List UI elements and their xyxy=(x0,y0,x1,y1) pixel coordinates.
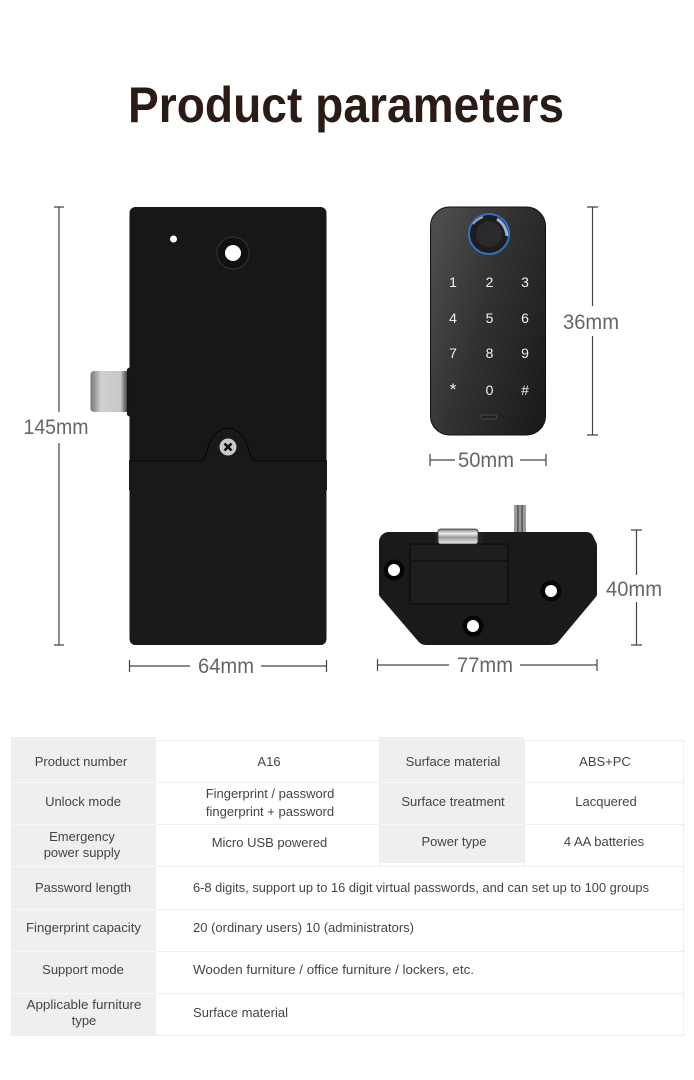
keypad digits: 5 xyxy=(486,310,494,326)
keypad digits: 9 xyxy=(521,345,529,361)
dimension: 145mm height xyxy=(24,207,88,645)
dimension: 40mm height: 40mm xyxy=(606,578,662,601)
row: emergency power: Power type xyxy=(421,834,487,849)
row: unlock mode: Unlock mode xyxy=(45,794,121,809)
dimension: 50mm width xyxy=(430,449,546,472)
dimension: 36mm height: 36mm xyxy=(563,311,619,334)
dimension: 77mm width: 77mm xyxy=(457,654,513,677)
row: product number: ABS+PC xyxy=(579,754,631,769)
dimension: 64mm width xyxy=(130,655,326,678)
row: emergency power: Emergency xyxy=(49,829,115,844)
lock body front view xyxy=(90,207,327,645)
row: applicable furniture: Applicable furniture xyxy=(26,997,142,1012)
icon: fingerprint sensor xyxy=(469,214,509,254)
parameter table xyxy=(11,737,684,1036)
row: emergency power: Micro USB powered xyxy=(212,835,327,850)
keypad digits: 6 xyxy=(521,310,529,326)
row: password length: Password length xyxy=(35,880,131,895)
row: applicable furniture: type xyxy=(72,1013,96,1028)
icon: screw holes xyxy=(384,560,562,636)
keypad digits: 3 xyxy=(521,274,529,290)
row: unlock mode: fingerprint + password xyxy=(206,804,334,819)
dimension: 77mm width xyxy=(378,654,597,677)
row: product number: A16 xyxy=(257,754,281,769)
dimension: 145mm height: 145mm xyxy=(24,416,88,439)
row: fingerprint capacity xyxy=(26,920,414,935)
icon: led dot xyxy=(170,236,177,242)
row: fingerprint capacity: 20 (ordinary users) 10 (administrators) xyxy=(193,920,414,935)
row: product number: Surface material xyxy=(406,754,500,769)
keypad digits: 8 xyxy=(486,345,494,361)
row: emergency power: power supply xyxy=(44,845,121,860)
dimension: 64mm width: 64mm xyxy=(198,655,254,678)
row: password length: 6-8 digits, support up to 16 digit virtual passwords, and can set up to 100 groups xyxy=(193,880,649,895)
dimension: 40mm height xyxy=(606,530,662,645)
keypad digits xyxy=(449,274,529,399)
row: unlock mode: Fingerprint / password xyxy=(206,786,334,801)
row: unlock mode: Lacquered xyxy=(575,794,637,809)
keypad panel xyxy=(430,207,546,435)
keypad digits: 7 xyxy=(449,345,457,361)
icon: latch pin xyxy=(514,505,526,533)
icon: hinge xyxy=(434,529,484,544)
dimension: 50mm width: 50mm xyxy=(458,449,514,472)
lower cover xyxy=(129,428,327,645)
icon: silver bolt xyxy=(90,371,128,412)
icon: screw hole xyxy=(217,237,249,269)
row: support mode: Support mode xyxy=(42,962,124,977)
icon: usb port xyxy=(481,415,497,419)
row: emergency power: 4 AA batteries xyxy=(564,834,645,849)
row: product number xyxy=(35,754,631,769)
row: emergency power xyxy=(44,829,645,860)
dimension: 36mm height xyxy=(563,207,619,435)
keypad digits: * xyxy=(450,380,457,399)
row: fingerprint capacity: Fingerprint capacity xyxy=(26,920,141,935)
row: unlock mode xyxy=(45,786,637,819)
body panel xyxy=(130,207,326,645)
row: unlock mode: Surface treatment xyxy=(401,794,505,809)
title: Product parameters xyxy=(128,77,564,133)
keypad digits: 4 xyxy=(449,310,457,326)
table header shading xyxy=(11,737,524,1035)
row: support mode: Wooden furniture / office furniture / lockers, etc. xyxy=(193,962,474,977)
keypad digits: 0 xyxy=(486,382,494,398)
icon: cross screw xyxy=(220,438,236,456)
row: applicable furniture xyxy=(26,997,288,1028)
lock receiver bottom view xyxy=(379,505,597,645)
row: applicable furniture: Surface material xyxy=(193,1005,288,1020)
row: product number: Product number xyxy=(35,754,128,769)
keypad digits: 1 xyxy=(449,274,457,290)
receiver plate xyxy=(379,532,597,645)
keypad digits: 2 xyxy=(486,274,494,290)
row: support mode xyxy=(42,962,474,977)
recess xyxy=(410,544,508,604)
keypad digits: # xyxy=(521,382,529,398)
